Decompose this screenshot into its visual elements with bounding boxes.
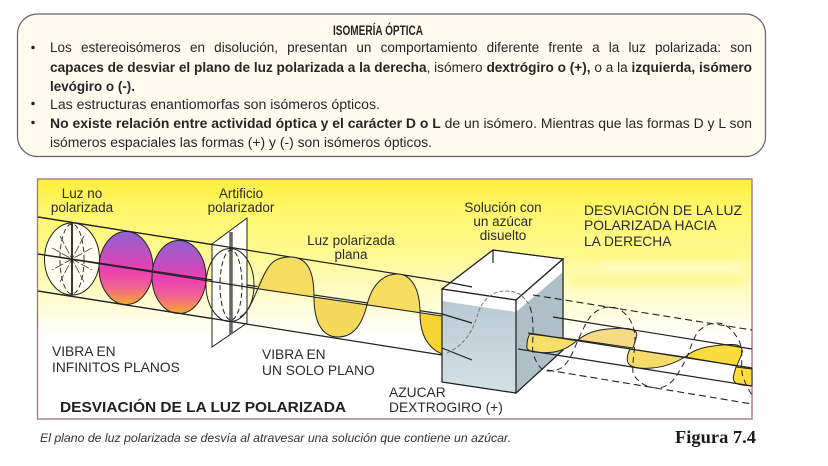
icon: purple beam disc 1 <box>99 232 153 304</box>
bullet list: Las estructuras enantiomorfas son isómeros ópticos. <box>50 97 380 112</box>
label: desviación de la luz polarizada hacia la derecha: LA DERECHA <box>584 234 672 249</box>
label: desviación de la luz polarizada hacia la derecha: DESVIACIÓN DE LA LUZ <box>584 202 742 218</box>
chart: plane polarized wave <box>240 257 442 354</box>
icon: glass box with sugar solution <box>442 250 563 393</box>
label: luz polarizada plana: Luz polarizada <box>307 233 395 248</box>
label: vibra en infinitos planos: VIBRA EN <box>52 344 116 359</box>
label: vibra en un solo plano: UN SOLO PLANO <box>262 363 375 378</box>
label: solución con un azúcar disuelto: Solución con <box>464 200 542 215</box>
bullet list <box>31 38 752 150</box>
chart: rotated wave after solution <box>527 328 752 386</box>
label: vibra en infinitos planos: INFINITOS PLANOS <box>52 360 180 375</box>
bullet list: Los estereoisómeros en disolución, presentan un comportamiento diferente frente a la luz polarizada: son <box>50 40 752 55</box>
label: luz polarizada plana: plana <box>334 247 368 262</box>
bullet list: levógiro o (-). <box>50 79 135 94</box>
icon: polarizer plate <box>38 217 254 347</box>
diagram: unpolarized light cylinder <box>38 217 442 355</box>
label: solución con un azúcar disuelto: disuelto <box>480 228 526 243</box>
icon: unpolarized light circle <box>44 223 100 295</box>
bullet list: isómeros espaciales las formas (+) y (-) son isómeros ópticos. <box>50 135 432 150</box>
panel: isomería óptica text box <box>18 14 766 156</box>
bullet list: capaces de desviar el plano de luz polarizada a la derecha , isómero dextrógiro o (+), o a la izquierda, isómero <box>50 60 752 75</box>
panel: figure background <box>38 179 752 419</box>
label: luz no polarizada: Luz no <box>62 186 102 201</box>
figure title: DESVIACIÓN DE LA LUZ POLARIZADA <box>60 398 346 416</box>
figure number: Figura 7.4 <box>675 427 756 447</box>
label: desviación de la luz polarizada hacia la derecha: POLARIZADA HACIA <box>584 218 717 233</box>
heading: isomería óptica: ISOMERÍA ÓPTICA <box>333 23 423 38</box>
beam guide lines, left section <box>38 217 442 355</box>
label: vibra en un solo plano: VIBRA EN <box>262 347 326 362</box>
label: azúcar dextrógiro: AZUCAR <box>389 385 446 400</box>
bullet list: No existe relación entre actividad óptica y el carácter D o L de un isómero. Mientras que las formas D y L son <box>50 116 752 131</box>
icon: purple beam disc 2 <box>152 240 206 314</box>
label: azúcar dextrógiro: DEXTROGIRO (+) <box>389 400 503 415</box>
label: artificio polarizador: Artificio <box>219 186 263 201</box>
label: solución con un azúcar disuelto: un azúcar <box>473 214 533 229</box>
figure caption: El plano de luz polarizada se desvía al atravesar una solución que contiene un azúcar. <box>40 433 511 445</box>
label: luz no polarizada: polarizada <box>51 200 114 215</box>
label: artificio polarizador: polarizador <box>208 200 275 215</box>
beam guide lines and dashed helix after solution <box>518 295 753 404</box>
